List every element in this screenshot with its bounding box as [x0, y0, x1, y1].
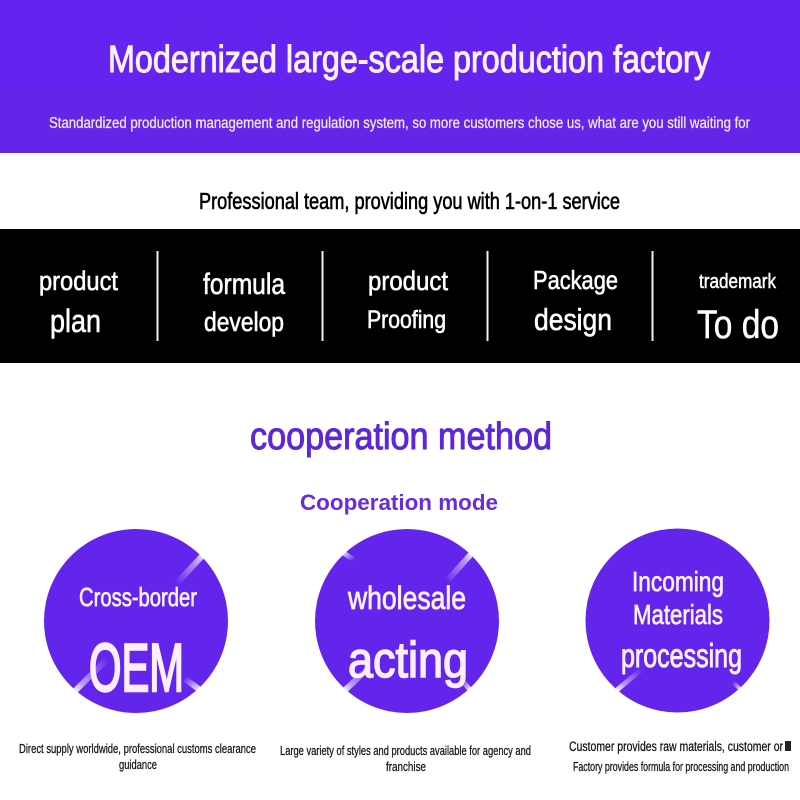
panel: OEM circle: [44, 529, 228, 713]
caption: incoming materials: [569, 739, 791, 774]
caption: wholesale acting: franchise: [386, 759, 426, 774]
step: package design: Package: [533, 265, 618, 295]
step: formula develop: develop: [204, 307, 284, 337]
step: formula develop: [203, 268, 285, 337]
step: product plan: plan: [50, 303, 101, 339]
panel: wholesale acting circle: [315, 529, 499, 713]
panel: wholesale acting circle: wholesale: [347, 580, 466, 616]
caption: OEM: Direct supply worldwide, professional customs clearance: [19, 741, 256, 756]
step: trademark to do: [697, 271, 779, 347]
step: trademark to do: To do: [697, 303, 779, 347]
step: product proofing: [367, 266, 448, 334]
service heading: Professional team, providing you with 1-on-1 service: [199, 188, 620, 214]
section subheading: Cooperation mode: [300, 490, 498, 515]
glints: [342, 552, 472, 691]
header banner: [0, 0, 800, 153]
title: Modernized large-scale production factory: [108, 39, 710, 81]
section heading: cooperation method: [250, 416, 552, 458]
panel: incoming materials circle: Materials: [633, 599, 723, 630]
step: trademark to do: trademark: [699, 271, 777, 293]
caption: wholesale acting: [280, 743, 531, 774]
panel: incoming materials circle: Incoming: [632, 566, 724, 597]
step: product proofing: Proofing: [367, 306, 446, 334]
caption: wholesale acting: Large variety of styles and products available for agency and: [280, 743, 531, 758]
panel: service steps: [0, 229, 800, 363]
step: formula develop: formula: [203, 268, 285, 301]
panel: incoming materials circle: processing: [621, 637, 742, 674]
dividers: [156, 251, 654, 341]
caption: OEM: guidance: [119, 757, 157, 772]
step: package design: [533, 265, 618, 337]
panel: incoming materials circle: [586, 528, 770, 712]
panel: wholesale acting circle: acting: [348, 632, 468, 688]
step: product plan: [39, 266, 118, 339]
caption: OEM: [19, 741, 256, 772]
glints: [74, 554, 204, 692]
step: package design: design: [534, 302, 612, 337]
step: product plan: product: [39, 266, 118, 296]
step: product proofing: product: [368, 266, 448, 296]
panel: OEM circle: OEM: [89, 630, 184, 706]
panel: OEM circle: Cross-border: [79, 582, 197, 612]
glints: [617, 669, 741, 690]
